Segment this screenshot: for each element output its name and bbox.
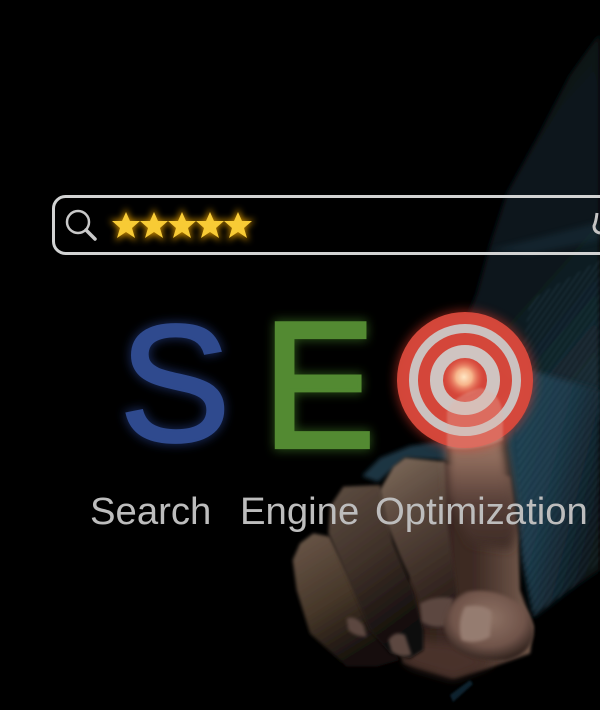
word: Search: Search: [90, 490, 211, 533]
upper sleeve: [462, 33, 600, 420]
thumbnail: [460, 606, 492, 642]
fingernails: [347, 597, 453, 656]
highlight fold: [490, 222, 600, 254]
star glow: [112, 211, 252, 239]
cuff: [362, 440, 448, 482]
word: Engine: Engine: [240, 490, 359, 533]
sleeve stripes: [515, 260, 600, 617]
hand: [293, 392, 534, 678]
search bar: [54, 196, 600, 254]
middle finger: [380, 458, 457, 628]
palm behind fingers: [390, 463, 533, 678]
target icon: [395, 310, 535, 450]
letter S: S: [119, 291, 231, 477]
target rings: [397, 312, 533, 448]
thumb: [443, 591, 534, 660]
bottom of palm: [403, 640, 493, 678]
letter S: S: [119, 291, 231, 477]
fingertip seen through the target: [447, 388, 503, 449]
word: Optimization: Optimization: [375, 490, 588, 533]
lower sleeve: [500, 370, 600, 617]
stars: [112, 212, 252, 238]
letter E: E: [263, 285, 375, 485]
five star rating: [112, 211, 252, 239]
cropped glyph at the right of the search bar: [594, 213, 600, 233]
target core: [444, 357, 484, 397]
sleeve of the shirt: [362, 33, 600, 702]
target glow: [395, 310, 535, 450]
caption: Search Engine Optimization: [90, 490, 588, 533]
icon: magnifying glass: [67, 211, 95, 239]
ring finger: [328, 485, 423, 658]
pinky finger: [293, 533, 400, 667]
index finger: [445, 392, 517, 550]
lower cloth sliver: [450, 680, 473, 702]
letter E: E: [263, 285, 375, 485]
